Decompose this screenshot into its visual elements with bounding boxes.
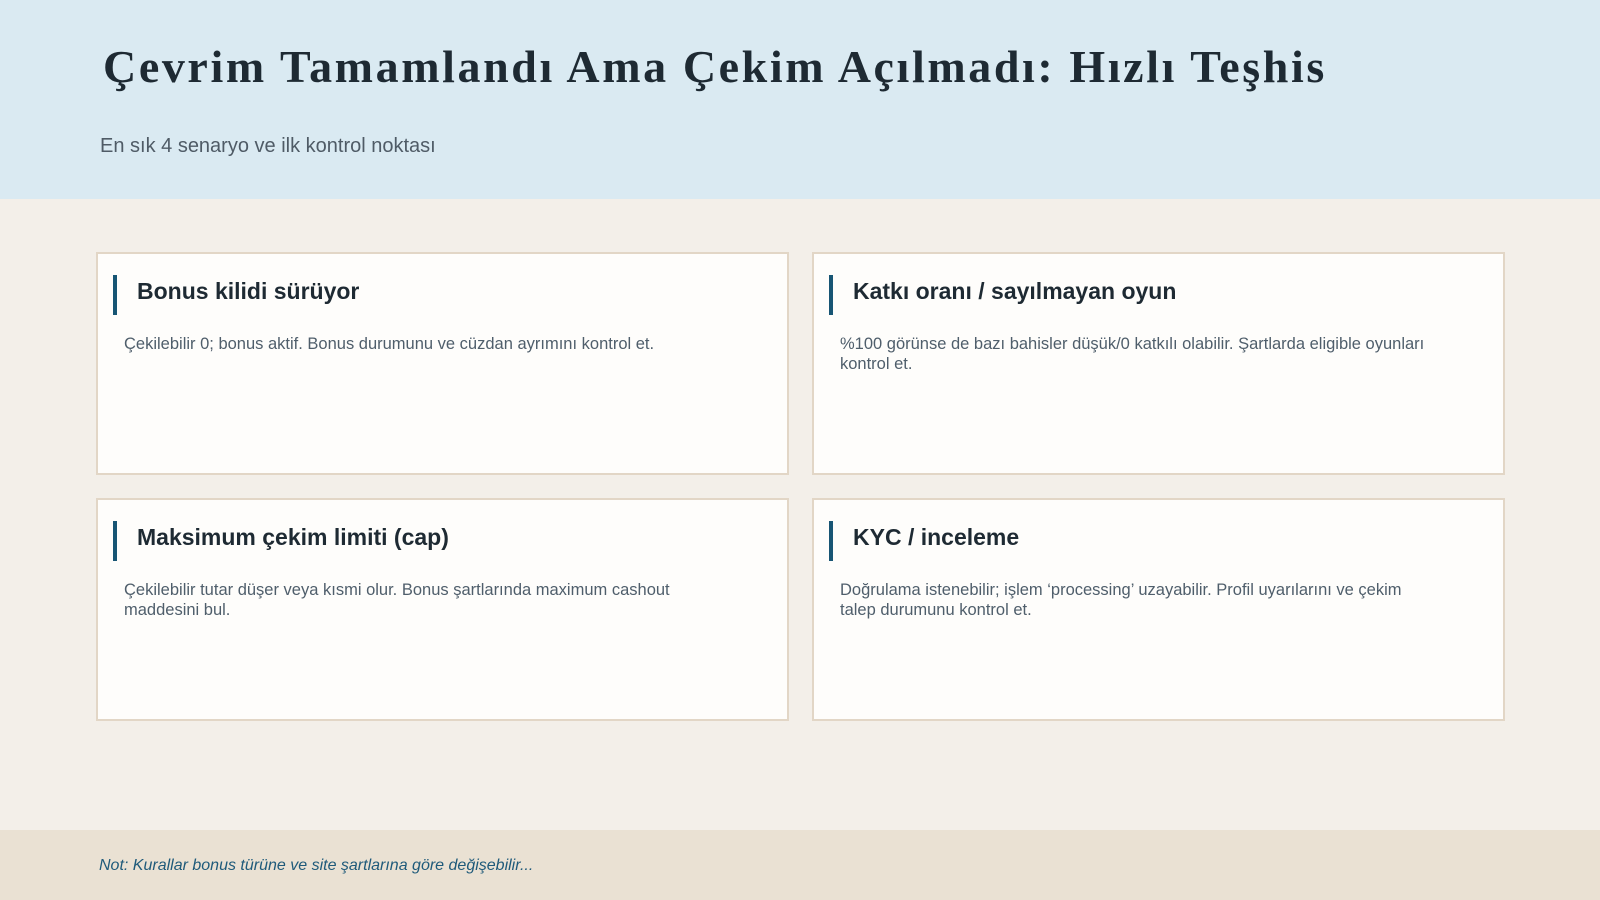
accent bar [829,275,833,315]
header [0,0,1600,199]
title: Çevrim Tamamlandı Ama Çekim Açılmadı: Hızlı Teşhis [103,41,1327,92]
footer [0,830,1600,900]
panel: max cashout [96,498,789,721]
accent bar [113,521,117,561]
text: Doğrulama istenebilir; işlem ‘processing’ uzayabilir. Profil uyarılarını ve çekim talep durumunu kontrol et. [840,581,1402,619]
heading: Bonus kilidi sürüyor [137,278,359,304]
text: Çekilebilir tutar düşer veya kısmi olur. Bonus şartlarında maximum cashout maddesini bul. [124,581,670,619]
accent bar [113,275,117,315]
panel: KYC [812,498,1505,721]
footer note: Not: Kurallar bonus türüne ve site şartlarına göre değişebilir... [99,857,533,874]
text: %100 görünse de bazı bahisler düşük/0 katkılı olabilir. Şartlarda eligible oyunları kontrol et. [840,335,1424,373]
panel: contribution [812,252,1505,475]
panel: bonus lock [96,252,789,475]
text: Çekilebilir 0; bonus aktif. Bonus durumunu ve cüzdan ayrımını kontrol et. [124,335,654,353]
heading: KYC / inceleme [853,524,1019,550]
heading: Maksimum çekim limiti (cap) [137,524,449,550]
heading: Katkı oranı / sayılmayan oyun [853,278,1176,304]
accent bar [829,521,833,561]
subtitle: En sık 4 senaryo ve ilk kontrol noktası [100,135,436,157]
